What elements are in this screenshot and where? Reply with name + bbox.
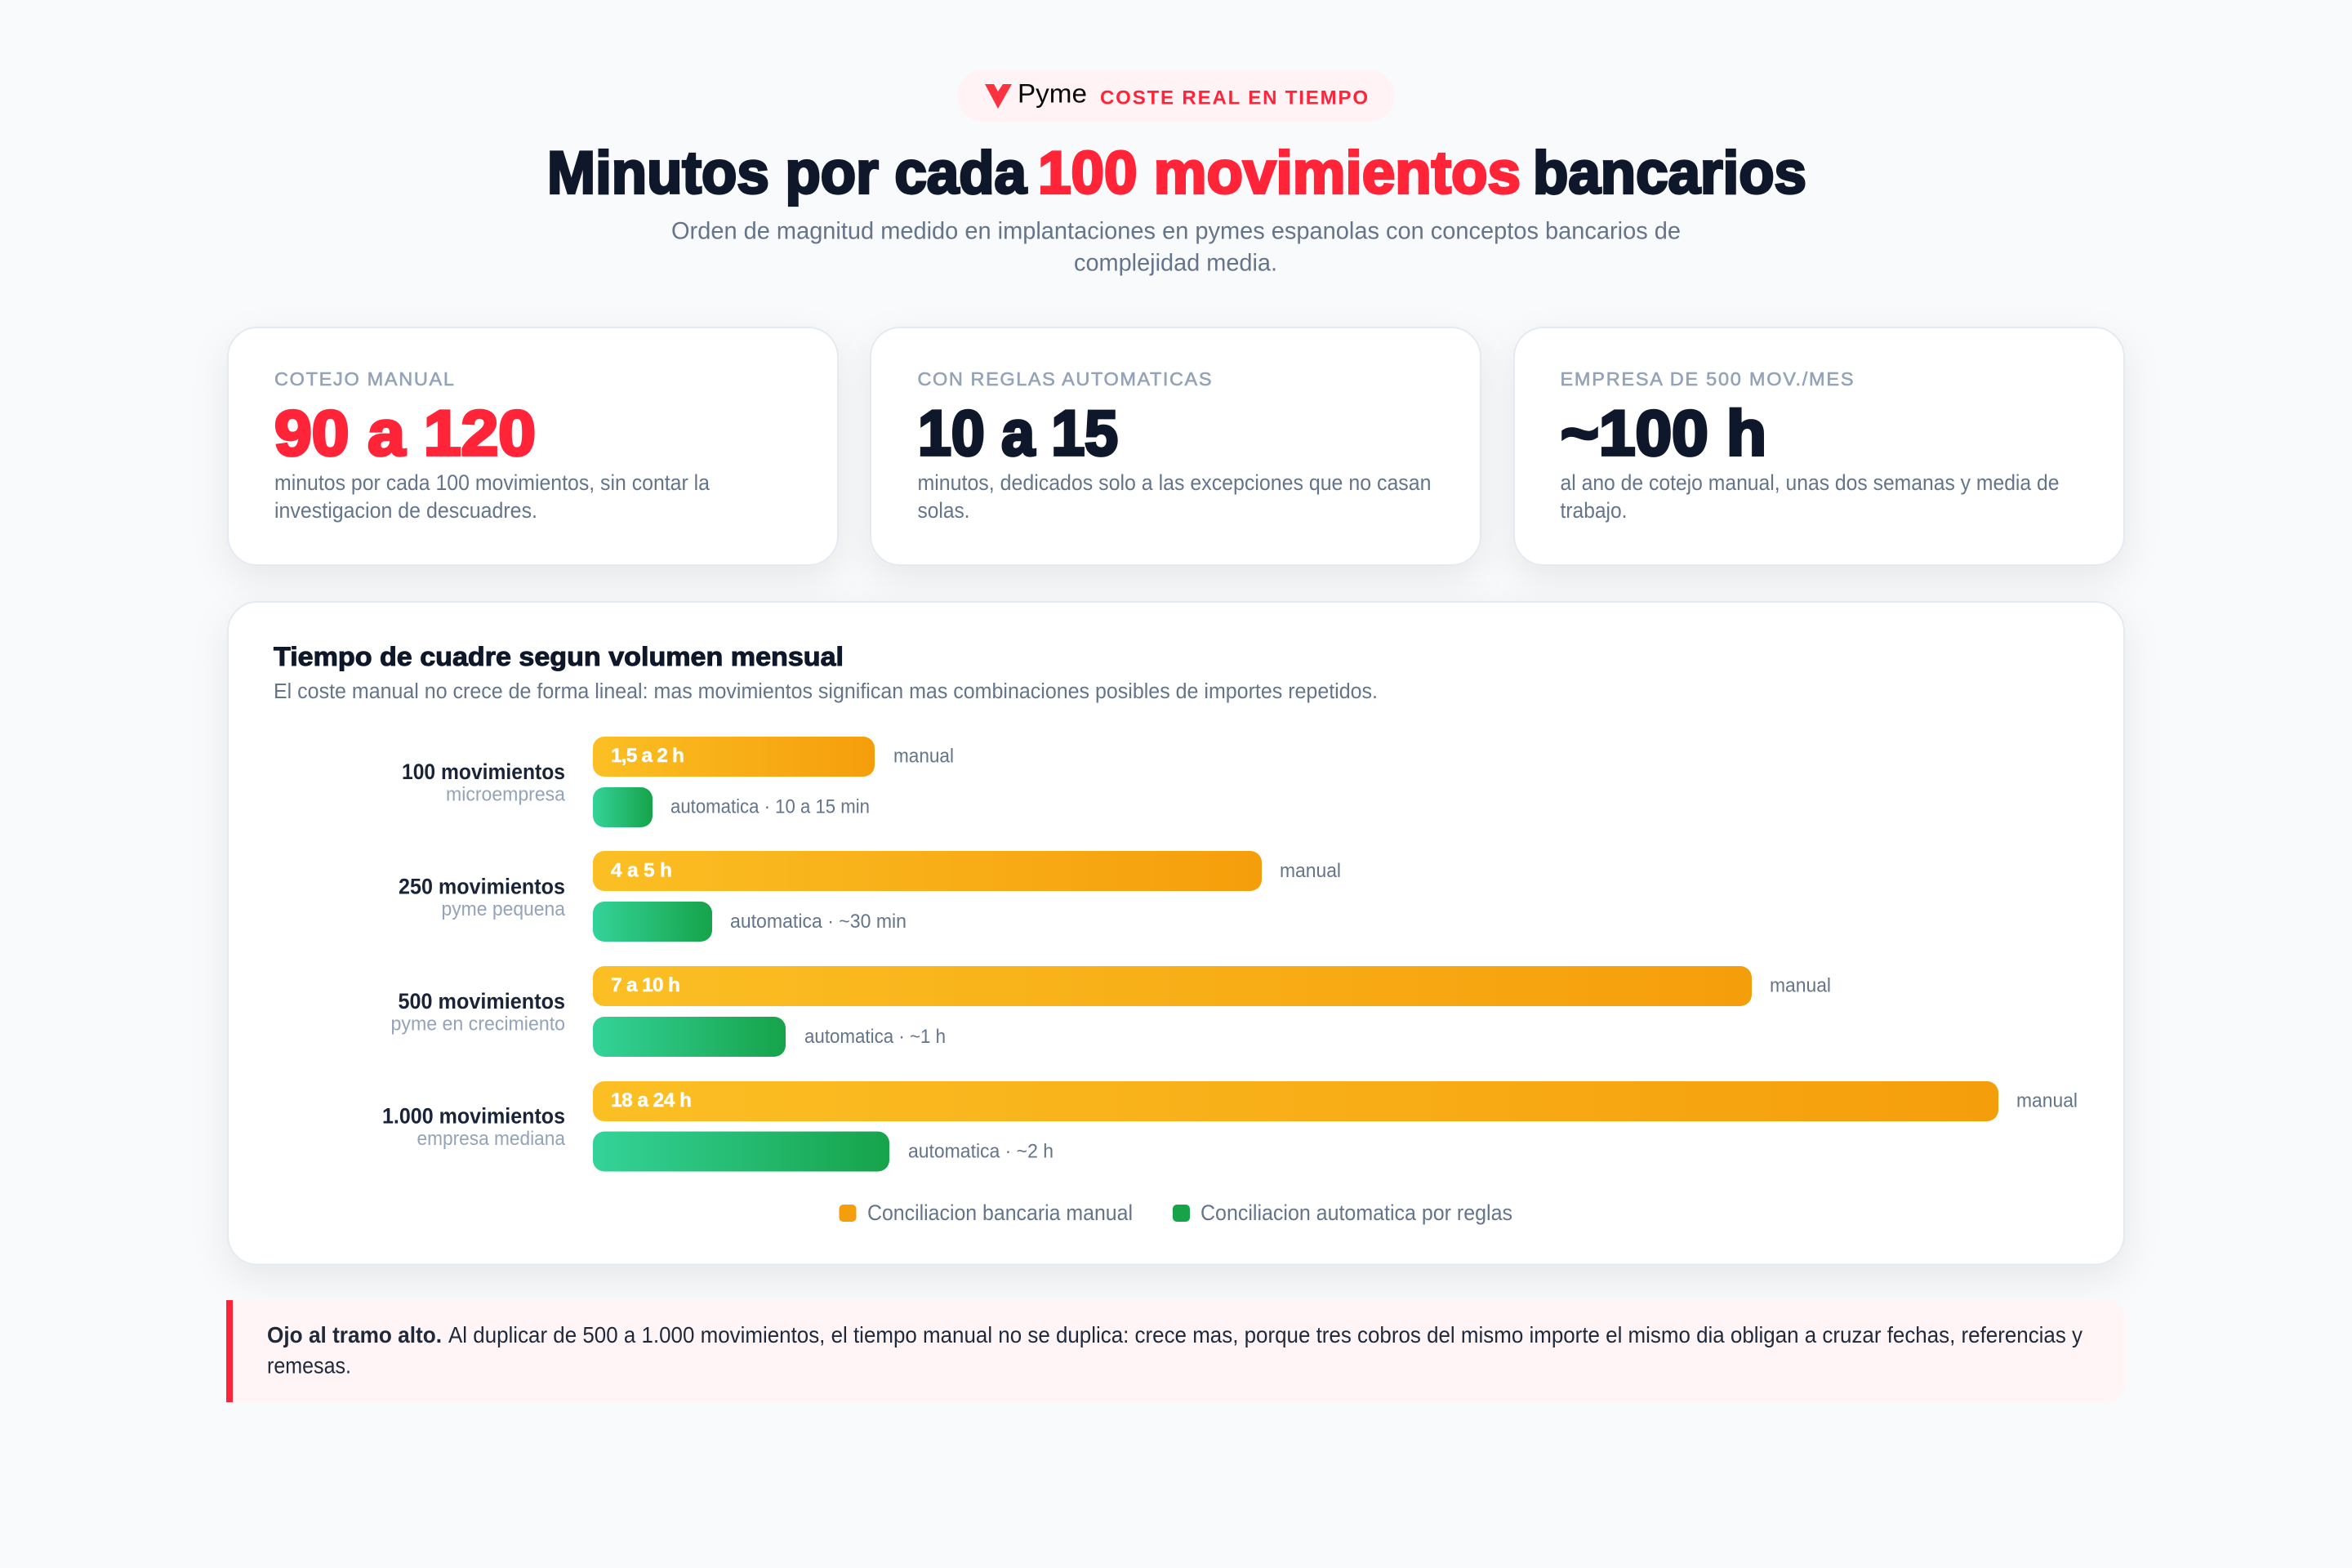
row: 1.000 movimientos: empresa mediana bbox=[416, 1128, 566, 1150]
stat description bbox=[1560, 470, 2060, 523]
panel: tiempo de cuadre chart bbox=[228, 602, 2124, 1264]
row: 100 movimientos: manual bbox=[893, 745, 954, 768]
row: 500 movimientos: 7 a 10 h bbox=[611, 974, 680, 996]
stat description bbox=[274, 470, 710, 523]
subtitle: Orden de magnitud medido en implantaciones en pymes espanolas con conceptos bancarios de bbox=[671, 217, 1681, 245]
stat description: investigacion de descuadres. bbox=[274, 498, 537, 523]
row: 500 movimientos bbox=[390, 966, 1831, 1057]
row: 250 movimientos: 250 movimientos bbox=[399, 874, 565, 898]
row: 250 movimientos: manual bbox=[1280, 860, 1341, 882]
chart subheading: El coste manual no crece de forma lineal: mas movimientos significan mas combinaciones posibles de importes repetidos. bbox=[274, 680, 1378, 703]
title: Minutos por cada bbox=[547, 140, 1027, 206]
row: 500 movimientos: manual bbox=[1770, 975, 1831, 996]
subtitle: complejidad media. bbox=[1074, 250, 1277, 276]
automatic bar bbox=[593, 787, 653, 827]
row: 100 movimientos bbox=[402, 737, 954, 827]
panel: con reglas automaticas bbox=[871, 327, 1481, 565]
panel: cotejo manual bbox=[228, 327, 838, 565]
automatic bar bbox=[593, 902, 712, 942]
row: 100 movimientos: 100 movimientos bbox=[402, 760, 565, 784]
legend bbox=[840, 1200, 1512, 1225]
stat description: minutos, dedicados solo a las excepciones que no casan bbox=[918, 470, 1431, 495]
legend: Conciliacion bancaria manual bbox=[867, 1200, 1133, 1225]
stat description: solas. bbox=[918, 498, 970, 523]
title: 100 movimientos bbox=[1038, 140, 1521, 206]
stat description: minutos por cada 100 movimientos, sin contar la bbox=[274, 470, 710, 495]
chart heading: Tiempo de cuadre segun volumen mensual bbox=[274, 642, 844, 671]
callout: Ojo al tramo alto. bbox=[267, 1322, 442, 1348]
manual bar bbox=[593, 851, 1262, 891]
title bbox=[547, 140, 1806, 206]
row: 1.000 movimientos: manual bbox=[2016, 1089, 2078, 1112]
stat value: 90 a 120 bbox=[274, 397, 536, 469]
panel: empresa de 500 mov/mes bbox=[1514, 327, 2124, 565]
logo wordmark: Pyme bbox=[1018, 78, 1087, 108]
stat value: ~100 h bbox=[1561, 397, 1766, 469]
row: 250 movimientos bbox=[399, 851, 1341, 942]
callout: Al duplicar de 500 a 1.000 movimientos, el tiempo manual no se duplica: crece mas, porque tres cobros del mismo importe el mismo dia obligan a cruzar fechas, referencias y bbox=[448, 1322, 2082, 1348]
row: 500 movimientos: 500 movimientos bbox=[399, 989, 565, 1013]
stat description: trabajo. bbox=[1560, 498, 1627, 523]
stat description: al ano de cotejo manual, unas dos semanas y media de bbox=[1560, 470, 2060, 495]
callout bbox=[226, 1300, 2126, 1402]
row: 100 movimientos: 1,5 a 2 h bbox=[611, 745, 684, 767]
row: 1.000 movimientos: automatica · ~2 h bbox=[908, 1140, 1054, 1163]
row: 250 movimientos: 4 a 5 h bbox=[611, 859, 672, 882]
panel: cotejo manual: COTEJO MANUAL bbox=[274, 368, 454, 390]
title: bancarios bbox=[1533, 140, 1806, 206]
row: 1.000 movimientos: 1.000 movimientos bbox=[382, 1104, 565, 1129]
panel: con reglas automaticas: CON REGLAS AUTOMATICAS bbox=[918, 368, 1212, 390]
stat value: 10 a 15 bbox=[918, 397, 1118, 469]
row: 1.000 movimientos bbox=[382, 1081, 2078, 1171]
manual bar bbox=[593, 1081, 1998, 1121]
manual bar bbox=[593, 966, 1752, 1006]
row: 250 movimientos: pyme pequena bbox=[441, 898, 566, 920]
callout: remesas. bbox=[267, 1352, 351, 1379]
panel: empresa de 500 mov/mes: EMPRESA DE 500 MOV./MES bbox=[1560, 368, 1854, 390]
manual bar bbox=[593, 737, 875, 777]
row: 500 movimientos: automatica · ~1 h bbox=[804, 1026, 946, 1048]
stat description bbox=[918, 470, 1431, 523]
legend: Conciliacion automatica por reglas bbox=[1200, 1200, 1512, 1225]
subtitle bbox=[671, 217, 1681, 276]
row: 500 movimientos: pyme en crecimiento bbox=[390, 1013, 565, 1036]
automatic bar bbox=[593, 1017, 786, 1057]
row: 1.000 movimientos: 18 a 24 h bbox=[611, 1089, 692, 1111]
row: 100 movimientos: microempresa bbox=[446, 784, 566, 805]
automatic bar bbox=[593, 1132, 889, 1171]
row: 250 movimientos: automatica · ~30 min bbox=[730, 911, 906, 933]
icon: Pyme logo mark bbox=[985, 84, 1012, 109]
header badge bbox=[957, 70, 1395, 122]
badge tagline: COSTE REAL EN TIEMPO bbox=[1100, 87, 1368, 109]
row: 100 movimientos: automatica · 10 a 15 min bbox=[670, 795, 870, 818]
